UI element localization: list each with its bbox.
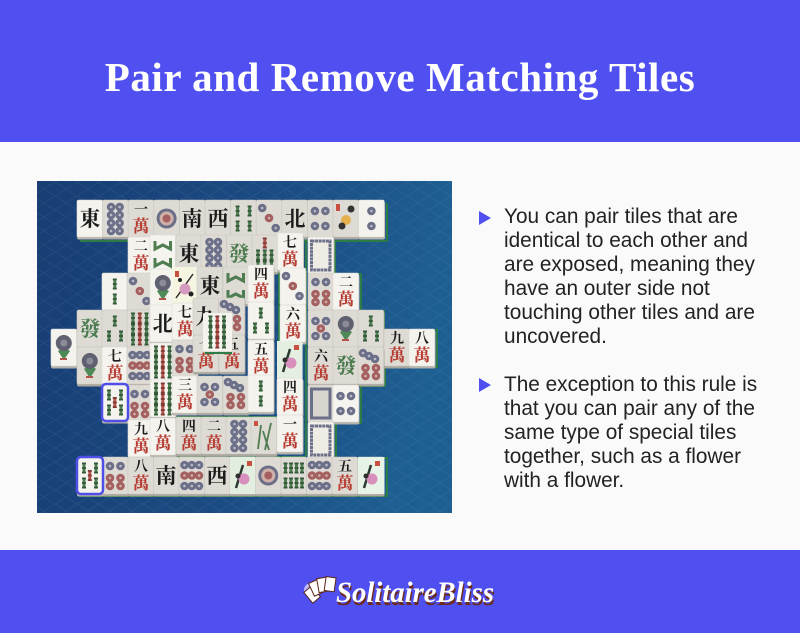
tile row 7: 八 — [156, 420, 170, 435]
raised centre stack: 萬 — [224, 351, 240, 371]
tile row 1: 西 — [208, 207, 228, 231]
bullet text 2: The exception to this rule is — [504, 373, 757, 396]
tile row 7: 九 — [134, 421, 148, 438]
tile row 2: 發 — [228, 242, 250, 266]
tile row 7: 萬 — [180, 433, 198, 453]
tile row 8: 南 — [156, 464, 176, 488]
tile row 5: 萬 — [106, 363, 124, 383]
tile row 5: 萬 — [252, 356, 270, 376]
tile row 1 — [77, 200, 385, 240]
tile row 1: 南 — [182, 207, 202, 231]
tile row 4: 萬 — [414, 345, 430, 365]
tile row 7: 二 — [207, 420, 221, 435]
tile row 5 — [77, 340, 384, 386]
raised centre stack — [193, 298, 246, 374]
tile row 2: 萬 — [132, 253, 150, 273]
tile row 2: 二 — [134, 240, 148, 255]
bullet text 1: uncovered. — [504, 325, 607, 348]
tile row 3: 萬 — [338, 289, 354, 309]
bullet text 2: with a flower. — [504, 469, 624, 492]
bullet text 1: have an outer side not — [504, 277, 710, 300]
tile row 8: 萬 — [132, 473, 150, 493]
footer banner — [0, 550, 800, 633]
bullet text 2: that you can pair any of the — [504, 397, 755, 420]
tile row 4: 六 — [286, 307, 302, 323]
tile row 7: 萬 — [206, 433, 222, 453]
tile row 7: 萬 — [132, 436, 150, 456]
tile row 5: 發 — [336, 354, 356, 378]
tile row 1: 北 — [284, 207, 306, 231]
tile row 8: 五 — [338, 459, 352, 475]
tile row 3: 萬 — [252, 281, 270, 301]
selected tile: lower — [77, 457, 104, 496]
tile row 4: 發 — [80, 317, 100, 341]
tile row 5: 五 — [254, 342, 268, 358]
tile row 5: 七 — [108, 349, 122, 365]
blue patterned game background — [37, 181, 452, 513]
mahjong game screenshot — [37, 181, 452, 513]
bullet text 1: touching other tiles and are — [504, 301, 755, 324]
title: Pair and Remove Matching Tiles — [105, 54, 695, 100]
tile row 5: 六 — [314, 349, 330, 365]
tile row 7: 萬 — [282, 431, 298, 451]
tile row 8: 萬 — [336, 473, 354, 493]
raised centre stack: 九 — [196, 305, 216, 329]
tile row 4: 七 — [178, 305, 192, 321]
tile row 4: 八 — [415, 332, 429, 347]
tile row 7 — [128, 415, 334, 462]
bullet text 2: together, such as a flower — [504, 445, 741, 468]
tile row 1: 萬 — [132, 216, 150, 236]
tile row 4: 萬 — [176, 319, 194, 339]
tile row 6: 三 — [178, 378, 192, 394]
logo wordmark: SolitaireBliss — [337, 579, 495, 612]
header banner — [0, 0, 800, 142]
tile row 2 — [128, 233, 334, 276]
tile row 6 — [127, 375, 360, 424]
tile row 3: 四 — [254, 267, 268, 283]
tile row 2: 東 — [178, 242, 200, 266]
tile row 3: 東 — [200, 274, 220, 298]
raised centre stack: 萬 — [198, 351, 214, 371]
tile row 2: 萬 — [282, 249, 298, 269]
tile row 8: 八 — [134, 460, 148, 475]
raised centre stack: 七 — [199, 337, 213, 353]
bullet text 1: identical to each other and — [504, 229, 748, 252]
tile row 1: 東 — [80, 207, 100, 231]
logo wordmark: SolitaireBliss — [336, 576, 494, 609]
tile row 2: 七 — [283, 235, 297, 251]
tile row 6: 萬 — [282, 394, 298, 414]
tile row 4: 萬 — [388, 345, 406, 365]
bullet text 2: same type of special tiles — [504, 421, 736, 444]
Solitaire Bliss logo — [303, 576, 495, 612]
bullet icon 1 — [479, 211, 491, 225]
tile row 6: 萬 — [176, 392, 194, 412]
tile row 3: 二 — [339, 276, 353, 291]
icon: card fan — [304, 577, 336, 603]
tile row 4: 九 — [390, 330, 404, 347]
tile row 7: 四 — [182, 419, 196, 435]
tile row 7: 萬 — [154, 433, 172, 453]
tile row 8 — [102, 457, 384, 496]
bullet text 1: You can pair tiles that are — [504, 205, 738, 228]
bullet icon 2 — [479, 378, 491, 392]
tile row 6: 四 — [283, 380, 297, 396]
bullet text 1 — [504, 205, 755, 348]
selected tile: upper — [102, 384, 128, 424]
tile row 8: 西 — [206, 464, 228, 488]
tile row 3 — [102, 265, 360, 312]
tile row 4: 萬 — [284, 321, 302, 341]
tile row 1: 一 — [134, 203, 148, 218]
tile row 7: 一 — [283, 418, 297, 433]
tile row 4 — [51, 302, 436, 368]
tile row 5: 萬 — [312, 363, 330, 383]
bullet text 1: are exposed, meaning they — [504, 253, 755, 276]
tile row 4: 北 — [152, 312, 174, 336]
raised centre stack: 五 — [225, 337, 239, 353]
board green outline — [80, 203, 437, 496]
bullet text 2 — [504, 373, 757, 492]
